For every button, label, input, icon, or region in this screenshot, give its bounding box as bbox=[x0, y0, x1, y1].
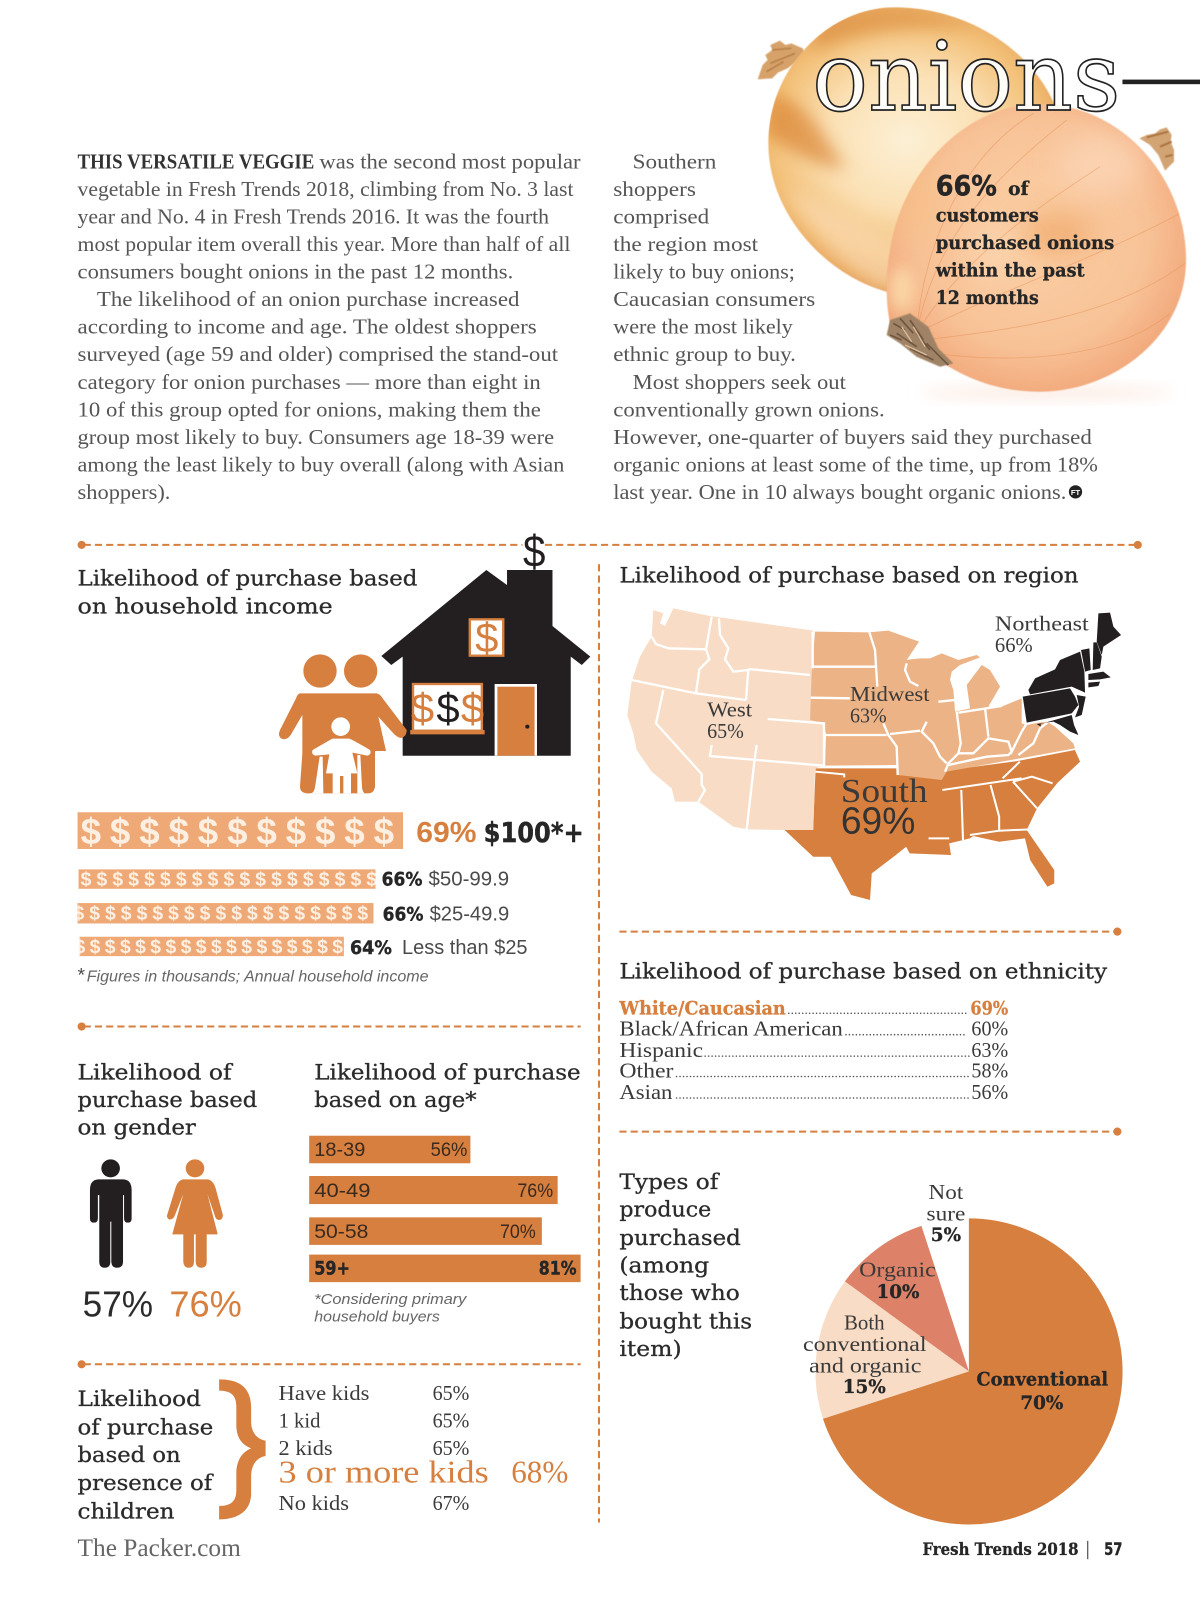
map label: West: 65% bbox=[707, 719, 744, 743]
stat: female 76%: 76% bbox=[169, 1283, 242, 1324]
front onion stem bbox=[1139, 127, 1174, 171]
text block: right column: ethnic group to buy. bbox=[613, 342, 796, 366]
slice: Organic 10% bbox=[845, 1226, 969, 1371]
children list: 3 or more kids bbox=[279, 1455, 489, 1490]
heading: children bbox=[78, 1387, 214, 1524]
text block: left column: surveyed (age 59 and older) comprised the stand-out bbox=[78, 342, 558, 366]
heading: children: Likelihood bbox=[78, 1387, 201, 1412]
bar: 18-39: 56% bbox=[431, 1139, 467, 1161]
map label: Midwest: Midwest bbox=[850, 682, 930, 706]
heading: types of produce: bought this bbox=[619, 1310, 752, 1335]
map label: Midwest: 63% bbox=[850, 703, 887, 727]
text block: right column: conventionally grown onions. bbox=[613, 397, 885, 421]
income bar: $50-99.9: $50-99.9 bbox=[429, 869, 509, 891]
callout: 66% of customers: 66% bbox=[936, 170, 997, 202]
footnote: age: household buyers bbox=[314, 1309, 440, 1325]
icon: house with dollar windows: $ bbox=[411, 684, 434, 731]
row: Other: 58% bbox=[971, 1059, 1008, 1083]
map region: South bbox=[784, 750, 1080, 900]
map label: West: West bbox=[707, 697, 752, 721]
bar: 50-58: 70% bbox=[500, 1221, 536, 1243]
row: White/Caucasian: White/Caucasian bbox=[618, 998, 786, 1019]
text block: right column bbox=[613, 149, 1098, 504]
text block: left column: The likelihood of an onion purchase increased bbox=[97, 287, 520, 311]
map label: Northeast: 66% bbox=[995, 633, 1033, 657]
income bar: $50-99.9: 66% bbox=[382, 870, 422, 891]
row: Asian: 56% bbox=[971, 1080, 1008, 1104]
icon: FT end mark bbox=[1069, 485, 1082, 498]
heading: children: children bbox=[78, 1499, 175, 1524]
footer: page info: Fresh Trends 2018 bbox=[922, 1539, 1079, 1559]
bar: 40-49 bbox=[309, 1176, 558, 1204]
icon: family bbox=[279, 654, 407, 793]
heading: children: of purchase bbox=[78, 1416, 213, 1441]
text block: right column: Most shoppers seek out bbox=[633, 370, 846, 394]
heading: types of produce bbox=[619, 1170, 752, 1362]
footer: The Packer.com: The Packer.com bbox=[78, 1533, 241, 1562]
text block: right column: were the most likely bbox=[613, 315, 793, 339]
text block: right column: Caucasian consumers bbox=[613, 287, 815, 311]
label: Not sure: Not bbox=[929, 1180, 963, 1204]
text block: left column: category for onion purchases — more than eight in bbox=[78, 370, 541, 394]
bar: 40-49: 40-49 bbox=[314, 1180, 370, 1202]
text block: left column: among the least likely to buy overall (along with Asian bbox=[78, 452, 565, 476]
children list: No kids bbox=[279, 1491, 349, 1515]
icon: chimney dollar sign: $ bbox=[523, 525, 545, 576]
children list: 65% bbox=[433, 1436, 469, 1460]
heading: types of produce: purchased bbox=[619, 1226, 741, 1251]
heading: children: presence of bbox=[78, 1471, 214, 1496]
text block: left column bbox=[78, 149, 581, 504]
heading: types of produce: (among bbox=[619, 1253, 710, 1278]
stat: male 57%: 57% bbox=[83, 1283, 153, 1324]
label: Both: 15% bbox=[843, 1377, 886, 1398]
children list bbox=[279, 1381, 568, 1515]
ethnicity list bbox=[618, 998, 1008, 1104]
callout: 66% of customers: 12 months bbox=[936, 288, 1039, 309]
heading: types of produce: Types of bbox=[619, 1170, 721, 1195]
map label: South: South bbox=[841, 773, 928, 810]
callout: 66% of customers: purchased onions bbox=[936, 233, 1114, 254]
label: Not sure bbox=[927, 1180, 965, 1246]
text block: right column: comprised bbox=[613, 204, 710, 228]
back onion orange shading bbox=[765, 9, 975, 293]
icon: man bbox=[90, 1159, 132, 1268]
label: Conventional: 70% bbox=[1020, 1393, 1063, 1414]
income bar: $100+: $100*+ bbox=[484, 817, 584, 849]
bar: 18-39: 18-39 bbox=[314, 1139, 365, 1161]
text block: left column: vegetable in Fresh Trends 2018, climbing from No. 3 last bbox=[78, 177, 574, 201]
income bar: $25-49.9 bbox=[78, 903, 508, 924]
income bar: $100+: 69% bbox=[416, 817, 477, 849]
text block: left column: consumers bought onions in the past 12 months. bbox=[78, 260, 513, 284]
footnote: income: Figures in thousands; Annual household income bbox=[87, 969, 429, 986]
icon: house with dollar windows: $ bbox=[461, 684, 484, 731]
text block: left column: according to income and age. The oldest shoppers bbox=[78, 315, 537, 339]
text block: right column: shoppers bbox=[613, 177, 696, 201]
income bar: $50-99.9: $$$$$$$$$$$$$$$$$$$ bbox=[81, 869, 382, 891]
income bar: less than $25 bbox=[80, 936, 527, 956]
title rule bbox=[1122, 80, 1200, 84]
children list: Have kids bbox=[279, 1381, 369, 1405]
callout: 66% of customers: within the past bbox=[935, 261, 1085, 282]
map label: Northeast: Northeast bbox=[995, 612, 1089, 636]
income bar: $100+: $$$$$$$$$$$$$ bbox=[81, 811, 462, 852]
text block: left column: was the second most popular bbox=[319, 149, 581, 173]
footnote: income: * bbox=[78, 965, 86, 987]
label: Conventional: Conventional bbox=[977, 1370, 1108, 1391]
front onion shading bbox=[890, 133, 1143, 313]
heading: gender: on gender bbox=[78, 1116, 197, 1141]
income bar: $25-49.9: $25-49.9 bbox=[430, 903, 509, 925]
icon: house with dollar windows: $ bbox=[436, 684, 460, 731]
heading: age: Likelihood of purchase bbox=[314, 1061, 581, 1086]
row: Hispanic: 63% bbox=[971, 1038, 1008, 1062]
label: Both: conventional bbox=[803, 1332, 927, 1356]
image: two onions bbox=[758, 7, 1186, 399]
map region: Northeast bbox=[1023, 613, 1121, 735]
text block: left column: shoppers). bbox=[78, 480, 170, 504]
text block: left column: year and No. 4 in Fresh Trends 2016. It was the fourth bbox=[78, 204, 550, 228]
map region: Midwest bbox=[810, 631, 1075, 780]
heading: types of produce: item) bbox=[619, 1337, 682, 1362]
icon: house with dollar windows bbox=[381, 570, 590, 756]
footer: page info: 57 bbox=[1104, 1539, 1122, 1559]
children list: 67% bbox=[433, 1491, 469, 1515]
income bar: $25-49.9: $$$$$$$$$$$$$$$$$$$$ bbox=[73, 902, 389, 924]
text block: left column: THIS VERSATILE VEGGIE bbox=[78, 149, 314, 173]
heading: household income: Likelihood of purchase based bbox=[78, 567, 418, 592]
text block: left column: group most likely to buy. Consumers age 18-39 were bbox=[78, 425, 554, 449]
children list: 65% bbox=[433, 1409, 469, 1433]
text block: right column: However, one-quarter of buyers said they purchased bbox=[613, 425, 1092, 449]
income bar: $25-49.9: 66% bbox=[383, 904, 423, 925]
onion root tip bbox=[887, 313, 953, 367]
bar: 18-39 bbox=[309, 1136, 470, 1163]
label: Not sure: sure bbox=[927, 1201, 965, 1225]
row: Black/African American bbox=[619, 1017, 1008, 1041]
row: Black/African American: 60% bbox=[971, 1017, 1008, 1041]
heading: household income bbox=[78, 567, 418, 619]
row: Other: Other bbox=[619, 1059, 674, 1083]
label: Organic: Organic bbox=[859, 1258, 936, 1282]
front onion veins bbox=[917, 113, 1185, 358]
front onion bbox=[887, 104, 1186, 392]
label: Organic: 10% bbox=[876, 1282, 919, 1303]
bar chart: age bbox=[309, 1136, 581, 1282]
row: Other bbox=[619, 1059, 1008, 1083]
row: Hispanic: Hispanic bbox=[619, 1038, 703, 1062]
bar: 50-58 bbox=[309, 1217, 542, 1245]
footnote: age: *Considering primary bbox=[314, 1292, 468, 1308]
row: Hispanic bbox=[619, 1038, 1008, 1062]
icon: brace bbox=[219, 1379, 266, 1519]
income bar: less than $25: 64% bbox=[350, 938, 392, 959]
children list: 1 kid bbox=[279, 1409, 321, 1433]
slice: Conventional 70% bbox=[823, 1218, 1123, 1524]
text block: left column: 10 of this group opted for onions, making them the bbox=[78, 397, 541, 421]
pie chart bbox=[803, 1180, 1123, 1524]
map label: Northeast bbox=[995, 612, 1089, 657]
bar: 59+: 81% bbox=[539, 1258, 577, 1279]
bar: 59+: 59+ bbox=[314, 1258, 350, 1279]
heading: region: Likelihood of purchase based on region bbox=[619, 564, 1079, 589]
footnote: age bbox=[314, 1292, 468, 1325]
heading: age: based on age* bbox=[314, 1088, 477, 1113]
text block: right column: last year. One in 10 always bought organic onions. bbox=[613, 480, 1066, 504]
label: Both bbox=[803, 1311, 927, 1398]
text block: right column: organic onions at least some of the time, up from 18% bbox=[613, 452, 1098, 476]
heading: children: based on bbox=[78, 1443, 181, 1468]
heading: gender: purchase based bbox=[78, 1088, 257, 1113]
back onion stem bbox=[758, 41, 805, 79]
label: Conventional bbox=[977, 1370, 1108, 1414]
row: Black/African American: Black/African American bbox=[619, 1017, 843, 1041]
icon: FT end mark: FT bbox=[1071, 488, 1081, 497]
callout: 66% of customers: of bbox=[1008, 179, 1030, 200]
text block: left column: most popular item overall this year. More than half of all bbox=[78, 232, 571, 256]
onion floor shadow bbox=[920, 387, 1173, 399]
income bar: less than $25: Less than $25 bbox=[402, 937, 528, 959]
callout: 66% of customers: customers bbox=[936, 205, 1039, 226]
row: White/Caucasian bbox=[618, 998, 1008, 1019]
heading: types of produce: those who bbox=[619, 1281, 740, 1306]
map label: Midwest bbox=[850, 682, 930, 727]
label: Not sure: 5% bbox=[931, 1225, 961, 1246]
bar: 59+ bbox=[309, 1255, 581, 1282]
map region: West bbox=[627, 608, 824, 830]
heading: types of produce: produce bbox=[619, 1197, 711, 1222]
bar: 40-49: 76% bbox=[517, 1180, 553, 1202]
icon: house with dollar windows: $ bbox=[475, 614, 498, 661]
heading: ethnicity: Likelihood of purchase based on ethnicity bbox=[619, 960, 1108, 985]
heading: gender: Likelihood of bbox=[78, 1061, 234, 1086]
heading: gender bbox=[78, 1061, 257, 1141]
row: Asian bbox=[619, 1080, 1008, 1104]
text block: right column: Southern bbox=[633, 149, 717, 173]
slice: Both 15% bbox=[815, 1281, 969, 1419]
children list: 65% bbox=[433, 1381, 469, 1405]
income bar: less than $25: $$$$$$$$$$$$$$$$$$ bbox=[74, 936, 347, 958]
label: Organic bbox=[859, 1258, 936, 1303]
heading: household income: on household income bbox=[78, 594, 333, 619]
row: Asian: Asian bbox=[619, 1080, 673, 1104]
label: Both: and organic bbox=[809, 1353, 921, 1377]
bar: 50-58: 50-58 bbox=[314, 1221, 368, 1243]
back onion bbox=[768, 7, 1055, 292]
children list: 2 kids bbox=[279, 1436, 333, 1460]
map label: West bbox=[707, 697, 752, 743]
title: onions bbox=[812, 21, 1120, 133]
map: US regions bbox=[627, 608, 1121, 900]
text block: right column: the region most bbox=[613, 232, 758, 256]
children list: 68% bbox=[511, 1455, 568, 1490]
callout: 66% of customers bbox=[935, 170, 1114, 309]
map label: South bbox=[841, 773, 928, 842]
row: White/Caucasian: 69% bbox=[970, 998, 1008, 1019]
heading: age bbox=[314, 1061, 581, 1113]
text block: right column: likely to buy onions; bbox=[613, 260, 795, 284]
map label: South: 69% bbox=[841, 800, 915, 842]
label: Both: Both bbox=[844, 1311, 885, 1335]
income bar: $100+ bbox=[78, 812, 582, 849]
icon: woman bbox=[167, 1159, 223, 1268]
